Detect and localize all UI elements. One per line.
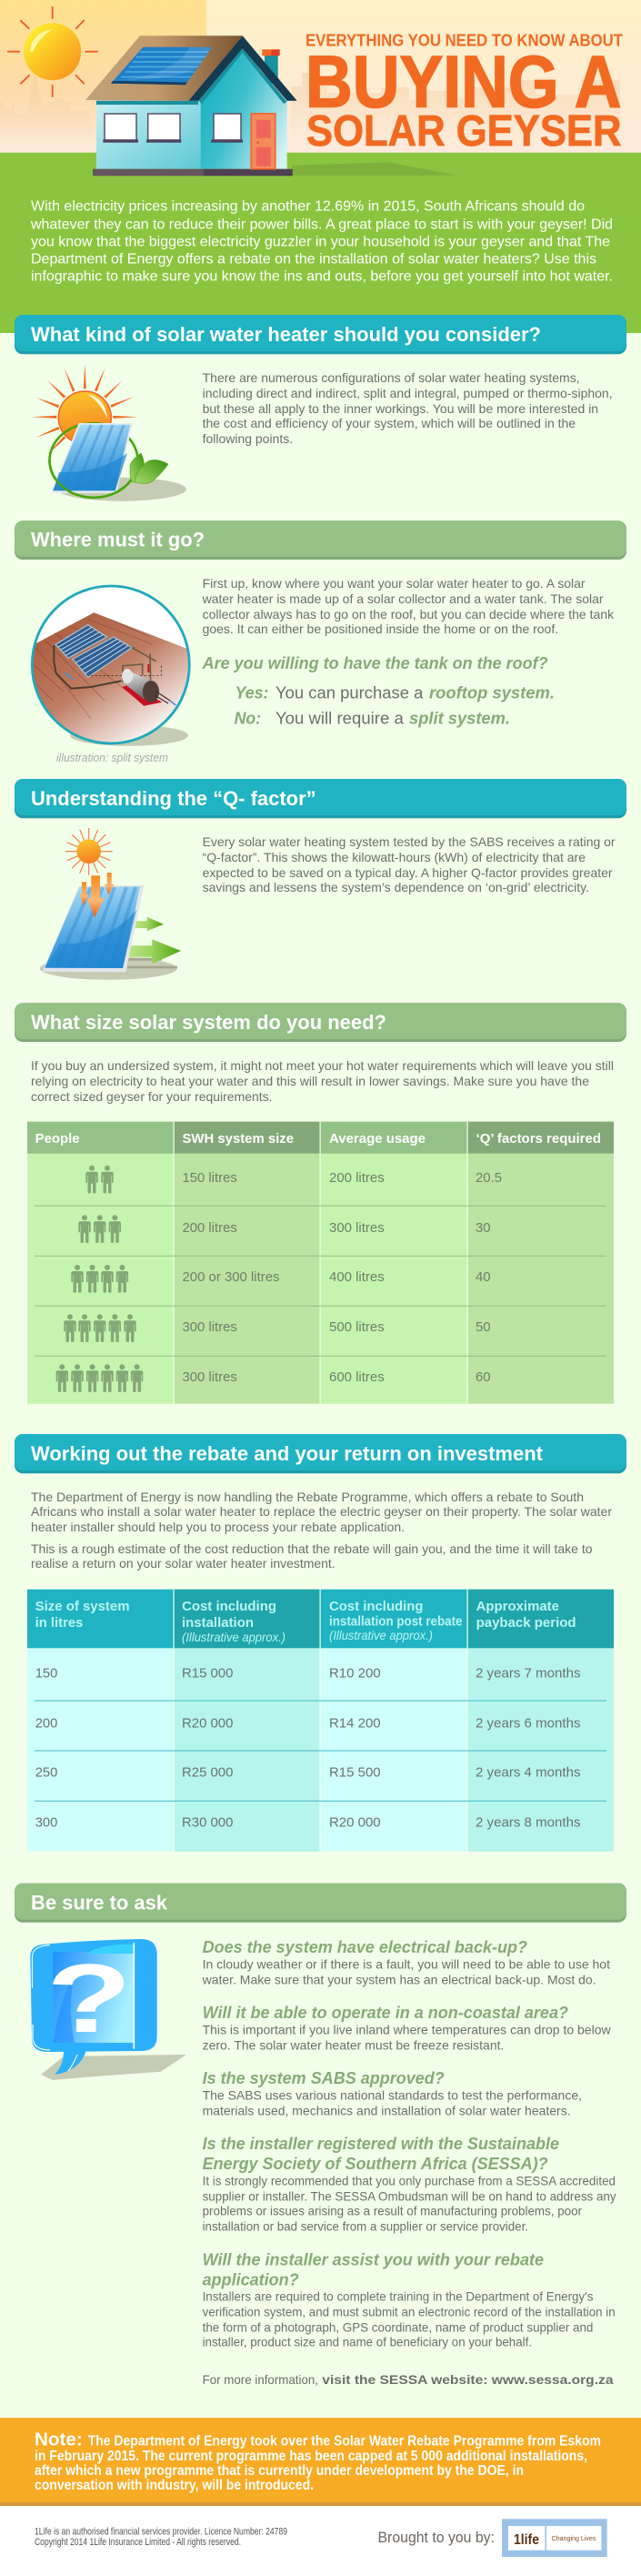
panel: understanding the Q-factor [15,779,626,980]
question: rebate application: Will the installer assist you with your rebate [203,2250,544,2268]
question callout [202,654,555,728]
intro text: Department of Energy offers a rebate on the installation of solar water heaters? Use this [31,252,596,268]
panel: what size solar system [15,1003,626,1404]
body text: expected to be saved on a typical day. A higher Q-factor provides greater [203,865,613,880]
illustration: split system [27,586,193,748]
question: SESSA registration: It is strongly recommended that you only purchase from a SESSA accredited [203,2173,616,2187]
heading [15,315,626,354]
brought to you by: Brought to you by: [378,2529,495,2546]
body text: goes. It can either be positioned inside the home or on the roof. [203,621,558,636]
table values: 500 litres [329,1319,385,1335]
question: SESSA registration: problems or issues arising as a result of manufacturing problems, poor [203,2203,582,2217]
icon: question mark speech bubble [30,1939,186,2080]
more information line [203,2372,614,2387]
body text: realise a return on your solar water heater investment. [31,1556,336,1571]
title [305,31,624,156]
question: rebate application: application? [203,2270,299,2288]
panel: note: Note: [35,2430,83,2450]
intro text: whatever they can to reduce their power bills. A great place to start is with your geyser! Did [30,217,613,233]
table values: 2 years 4 months [476,1764,580,1780]
question: electrical back-up: In cloudy weather or if there is a fault, you will need to be able to use hot [203,1956,610,1971]
table values: 60 [476,1369,491,1385]
question: SESSA registration: Is the installer registered with the Sustainable [203,2135,559,2153]
table values: R20 000 [182,1715,233,1731]
panel: header [0,0,641,333]
table values: 400 litres [329,1269,385,1285]
heading [15,779,626,818]
table values: 300 [35,1814,57,1830]
logo: 1Life: Changing Lives [551,2536,596,2542]
question: SABS approved [203,2069,582,2117]
table values: 2 years 8 months [476,1814,580,1830]
heading [15,1003,626,1042]
intro text: you know that the biggest electricity guzzler in your household is your geyser and that The [31,235,610,250]
table values: R10 200 [329,1665,381,1681]
table values: 300 litres [182,1369,237,1385]
green lawn [0,153,641,333]
more information line: visit the SESSA website: www.sessa.org.za [322,2372,614,2387]
body text: “Q-factor”. This shows the kilowatt-hours (kWh) of electricity that are [203,850,586,864]
heading [15,520,626,560]
question callout: Are you willing to have the tank on the roof? [202,654,548,672]
table header: (Illustrative approx.) [182,1630,285,1644]
body text [31,1058,614,1104]
heading: Be sure to ask [31,1891,168,1914]
question: rebate application: Installers are required to complete training in the Department of Energy's [203,2288,593,2303]
table values: 150 litres [182,1170,237,1186]
body text [203,834,616,894]
table values: 300 litres [329,1220,385,1236]
body text [202,576,615,636]
table values [35,1665,580,1830]
heading: What size solar system do you need? [31,1011,386,1034]
heading: Understanding the “Q- factor” [31,787,316,810]
table values: 200 litres [182,1220,237,1236]
table header [35,1600,576,1644]
table header: Approximate [476,1600,559,1614]
table values: 2 years 7 months [476,1665,580,1681]
icon: sun [7,6,98,97]
table header: installation [182,1616,254,1631]
table values: 2 years 6 months [476,1715,580,1731]
question: electrical back-up: Does the system have electrical back-up? [203,1938,527,1956]
table values: R15 000 [182,1665,233,1681]
table: system size by people [27,1122,614,1404]
panel: where must it go [15,520,626,764]
icon: question mark speech bubble: ? [46,1944,132,2053]
question: non-coastal area: This is important if you live inland where temperatures can drop to below [203,2022,611,2036]
caption: illustration: split system [56,752,168,764]
body text: The Department of Energy is now handling the Rebate Programme, which offers a rebate to South [31,1490,584,1504]
logo: 1Life [502,2519,607,2557]
question callout: split system. [409,710,510,728]
question: SESSA registration: supplier or installer. The SESSA Ombudsman will be on hand to address any [203,2188,616,2203]
table values: 50 [476,1319,491,1335]
body text: There are numerous configurations of solar water heating systems, [203,370,580,385]
question: SABS approved: The SABS uses various national standards to test the performance, [203,2087,582,2102]
icon: panel with sun and arrows [40,828,181,980]
table header: ‘Q’ factors required [476,1132,601,1147]
table values: 150 [35,1665,57,1681]
table values: 250 [35,1764,57,1780]
question callout: You can purchase a [275,684,424,702]
question callout: Yes: [235,684,269,702]
legal text: Copyright 2014 1Life Insurance Limited - All rights reserved. [35,2537,241,2548]
city skyline [0,73,620,153]
body text: correct sized geyser for your requirements. [31,1089,273,1104]
table values: 200 [35,1715,57,1731]
heading [15,1884,626,1923]
body text: water heater is made up of a solar collector and a water tank. The solar [202,591,604,606]
body text: collector always has to go on the roof, but you can decide where the tank [203,607,615,621]
question callout: No: [235,710,261,728]
panel: note [0,2418,641,2506]
question callout: You will require a [275,710,405,728]
legal text [35,2527,287,2548]
panel: be sure to ask [15,1884,626,2387]
panel: note: after which a new programme that is currently under development by the DOE, in [35,2463,524,2479]
table values: R14 200 [329,1715,381,1731]
body text: following points. [203,431,293,446]
table header: Cost including [329,1600,424,1614]
icon: house [85,35,458,176]
question: non-coastal area [203,2004,611,2052]
body text [31,1490,612,1571]
table: cost and payback [27,1590,614,1852]
question: SESSA registration [203,2135,616,2233]
question: SABS approved: Is the system SABS approved? [203,2069,445,2087]
table values: 300 litres [182,1319,237,1335]
table header [35,1132,601,1147]
panel: note: The Department of Energy took over the Solar Water Rebate Programme from Eskom [88,2433,601,2449]
legal text: 1Life is an authorised financial services provider. Licence Number: 24789 [35,2527,287,2538]
table values: 20.5 [476,1170,502,1186]
question: SABS approved: materials used, mechanics and installation of solar water heaters. [203,2103,571,2117]
table values: 40 [476,1269,491,1285]
panel: note: conversation with industry, will be introduced. [35,2478,314,2493]
panel: rebate and return on investment [15,1434,626,1852]
question: rebate application: installer, product size and name of beneficiary on your behalf. [203,2334,532,2349]
table values: 600 litres [329,1369,385,1385]
panel: footer [0,2506,641,2576]
table header: Size of system [35,1600,130,1614]
table values: 200 litres [329,1170,385,1186]
more information line: For more information, [203,2372,318,2387]
intro text: With electricity prices increasing by another 12.69% in 2015, South Africans should do [31,199,585,215]
table header: SWH system size [182,1132,294,1147]
table values: R15 500 [329,1764,381,1780]
body text: This is a rough estimate of the cost reduction that the rebate will gain you, and the time it will take to [31,1541,593,1556]
question: electrical back-up: water. Make sure that your system has an electrical back-up. Most do. [202,1972,596,1986]
question: rebate application: the form of a photograph, GPS coordinate, name of product supplier and [203,2319,593,2334]
body text: including direct and indirect, split and integral, pumped or thermo-siphon, [203,386,613,400]
table values: R30 000 [182,1814,233,1830]
table header: payback period [476,1616,576,1631]
body text [203,370,613,446]
body text: relying on electricity to heat your water and this will result in lower savings. Make sure you have the [31,1074,589,1088]
question: electrical back-up [202,1938,610,1986]
table header: Cost including [182,1600,276,1614]
table values: R20 000 [329,1814,381,1830]
intro text: infographic to make sure you know the ins and outs, before you get yourself into hot water. [31,269,613,285]
body text: Africans who install a solar water heater to replace the electric geyser on their property. The solar water [31,1504,612,1519]
heading [15,1434,626,1473]
question: rebate application [203,2250,616,2349]
people icons [56,1166,143,1392]
question: rebate application: verification system, and must submit an electronic record of the installation in [203,2304,616,2318]
icon: solar panel with sun and leaf [32,364,186,501]
table header: in litres [35,1616,83,1631]
heading: Where must it go? [31,529,205,551]
intro text [30,199,613,285]
body text: but these all apply to the inner workings. You will be more interested in [203,401,598,416]
panel: what kind of solar water heater [15,315,626,501]
question: non-coastal area: Will it be able to operate in a non-coastal area? [203,2004,568,2022]
table values: 200 or 300 litres [182,1269,280,1285]
table values: R25 000 [182,1764,233,1780]
body text: If you buy an undersized system, it might not meet your hot water requirements which will leave you still [31,1058,614,1073]
body text: First up, know where you want your solar water heater to go. A solar [203,576,586,591]
body text: Every solar water heating system tested by the SABS receives a rating or [203,834,616,849]
table header: Average usage [329,1132,426,1147]
question: SESSA registration: installation or bad service from a supplier or service provider. [203,2218,528,2233]
table values: 30 [476,1220,491,1236]
heading: What kind of solar water heater should you consider? [31,323,541,346]
table header: (Illustrative approx.) [329,1628,433,1642]
question: non-coastal area: zero. The solar water heater must be freeze resistant. [203,2037,504,2052]
table values [182,1170,502,1385]
logo: 1Life: 1life [514,2532,539,2548]
heading: Working out the rebate and your return on investment [31,1442,544,1465]
question callout: rooftop system. [429,684,555,702]
body text: savings and lessens the system’s dependence on ‘on-grid’ electricity. [203,880,589,894]
table header: installation post rebate [329,1615,462,1630]
body text: the cost and efficiency of your system, which will be outlined in the [203,416,576,430]
panel: note: in February 2015. The current programme has been capped at 5 000 additional installations, [35,2449,587,2464]
table header: People [35,1132,80,1147]
body text: heater installer should help you to process your rebate application. [31,1520,405,1534]
question: SESSA registration: Energy Society of Southern Africa (SESSA)? [203,2155,548,2173]
